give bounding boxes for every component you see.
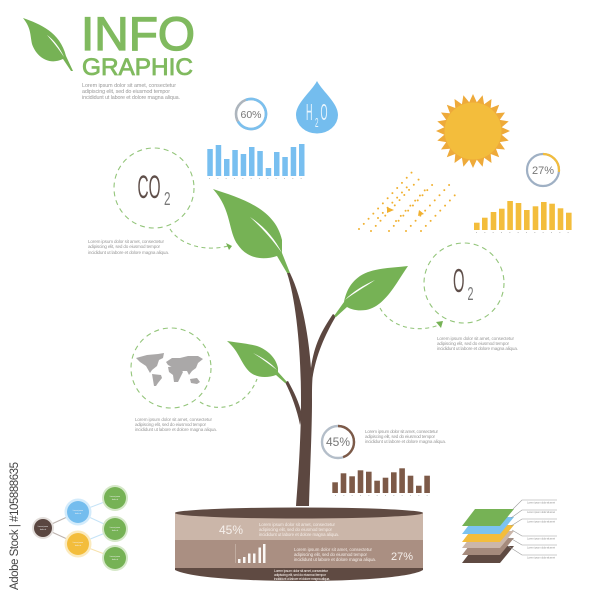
icon: water drop H2O: H [306,99,312,125]
pot text: lower: Lorem ipsum dolor sit amet, consectetur [294,547,373,552]
panel: CO2: 2 [164,189,170,209]
panel: O2: Lorem ipsum dolor sit amet, consectetur [437,336,514,341]
bar chart: yellow [474,201,572,230]
pot text: footer: Lorem ipsum dolor sit amet, consectetur [274,569,329,573]
tree node captions: dolor sit [75,544,82,547]
panel: CO2: adipiscing elit, sed do eiusmod tempor [88,244,160,249]
layer labels [527,500,555,560]
pot text: upper: adipiscing elit, sed do eiusmod tempor [259,527,333,532]
text block: 45%: Lorem ipsum dolor sit amet, consectetur [365,429,438,434]
tree diagram [32,485,128,571]
leaf: large top [213,189,290,273]
icon: water drop H2O: 2 [315,115,318,130]
tree node captions: Lorem ipsum [73,542,84,544]
icon: world map [136,353,203,386]
27% ring [527,154,559,186]
pot text: footer [274,569,330,581]
pot text: footer: adipiscing elit, sed do eiusmod tempor [274,573,327,577]
leaf: lower left [227,341,287,383]
panel: CO2 [88,148,232,255]
layer labels: Lorem ipsum dolor sit amet [527,500,555,504]
pot chart: white bars [236,544,266,563]
layer stack [462,500,557,563]
intro text block: adipiscing elit, sed do eiusmod tempor [82,89,170,95]
panel: CO2: Lorem ipsum dolor sit amet, consectetur [88,239,164,244]
panel: world map: adipiscing elit, sed do eiusmod tempor [135,422,206,427]
layer callouts [508,500,557,555]
panel: O2: O [453,262,464,299]
45% ring: 45% [326,435,350,449]
60% ring [232,95,270,133]
panel: world map: Lorem ipsum dolor sit amet, consectetur [135,417,212,422]
plant stem [285,273,336,506]
intro text block: incididunt ut labore et dolore magna aliqua. [82,95,180,101]
icon: water drop H2O [296,81,338,133]
panel: O2: 2 [468,284,474,304]
tree node captions: dolor sit [112,498,119,501]
tree node captions: Lorem ipsum [73,510,84,512]
tree node captions: dolor sit [40,528,47,531]
panel: CO2: incididunt ut labore et dolore magna aliqua. [88,250,169,255]
panel: O2: adipiscing elit, sed do eiusmod tempor [437,341,509,346]
pot text: upper: Lorem ipsum dolor sit amet, consectetur [259,522,336,527]
layer labels: Lorem ipsum dolor sit amet [527,510,555,514]
tree node captions: Lorem ipsum [110,527,121,529]
bar chart: brown [332,468,430,493]
title: GRAPHIC [82,54,193,81]
tree node captions: dolor sit [112,529,119,532]
text block: 45% [365,429,446,444]
pot text: lower: adipiscing elit, sed do eiusmod tempor [294,552,368,557]
panel: O2 [380,243,518,351]
panel: world map: incididunt ut labore et dolore magna aliqua. [135,427,217,432]
pot text: lower: incididunt ut labore et dolore magna aliqua. [294,557,376,562]
icon: sun [436,94,510,168]
text block: 45%: incididunt ut labore et dolore magna aliqua. [365,439,446,444]
vertical side label: Adobe Stock | #105888635 [9,462,21,590]
tree node captions: Lorem ipsum [110,496,121,498]
pot text: footer: incididunt ut labore et dolore magna aliqua. [274,577,330,581]
60% ring: 60% [240,109,262,121]
bar chart: blue [207,144,304,176]
text block: 45%: adipiscing elit, sed do eiusmod tempor [365,434,435,439]
layer labels: Lorem ipsum dolor sit amet [527,546,555,550]
pot [175,508,423,581]
leaf: right [334,266,408,317]
icon: water drop H2O: O [320,99,328,125]
intro text block [82,83,180,101]
tree node captions [38,496,121,561]
panel: CO2: CO [138,169,160,205]
sun rays: dotted diagonals [359,170,457,231]
45% ring [322,426,354,458]
title: INFO [81,7,195,60]
27% ring: 27% [532,165,554,177]
tree node captions: Lorem ipsum [38,526,49,528]
layer labels: Lorem ipsum dolor sit amet [527,520,555,524]
pot text: upper: incididunt ut labore et dolore magna aliqua. [259,532,339,537]
tree node captions: Lorem ipsum [110,556,121,558]
panel: world map [131,328,257,432]
layer labels: Lorem ipsum dolor sit amet [527,536,555,540]
icon: header leaf [23,18,73,71]
pot label: 27%: 27% [391,551,413,563]
layer labels: Lorem ipsum dolor sit amet [527,556,555,560]
pot label: 45%: 45% [219,523,243,537]
pot text: lower [294,547,376,562]
intro text block: Lorem ipsum dolor sit amet, consectetur [82,83,176,89]
tree node captions: dolor sit [112,558,119,561]
pot text: upper [259,522,339,537]
tree node captions: dolor sit [75,512,82,515]
panel: O2: incididunt ut labore et dolore magna aliqua. [437,346,518,351]
